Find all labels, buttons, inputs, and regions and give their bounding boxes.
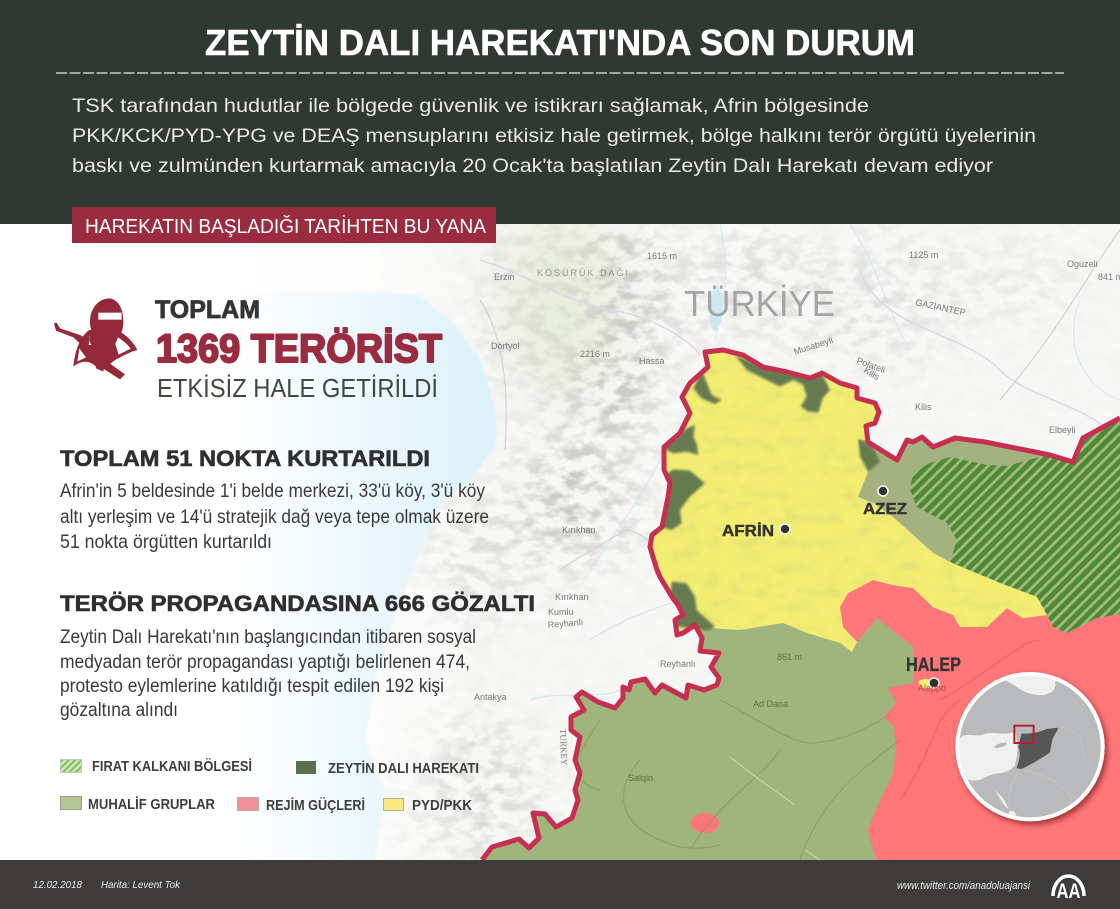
block: 51 nokta: TOPLAM 51 NOKTA KURTARILDI [60,446,430,471]
region: regime forces [840,580,1120,860]
block: 666 gözaltı: TERÖR PROPAGANDASINA 666 GÖZALTI [60,591,535,616]
legend: Muhalif: MUHALİF GRUPLAR [88,796,215,813]
legend: Fırat Kalkanı: FIRAT KALKANI BÖLGESİ [92,758,252,775]
locator square [1014,726,1034,743]
title: ZEYTİN DALI HAREKATI'NDA SON DURUM [205,22,915,63]
intro paragraph: PKK/KCK/PYD-YPG ve DEAŞ mensuplarını etkisiz hale getirmek, bölge halkını terör örgütü üyelerinin [72,125,1036,147]
block: 666 gözaltı: protesto eylemlerine katıldığı tespit edilen 192 kişi [60,676,444,697]
sea [0,292,496,860]
small map place names: KÖSÜRÜK DAĞI [537,268,630,278]
small map place names: Reyhanlı [547,617,584,630]
footer credits: 12.02.2018 [33,880,82,891]
small map place names: Kilis [862,365,882,382]
terrain on yellow [658,358,1008,642]
icon: Anadolu Agency logo: AA [1056,880,1080,903]
region: opposition groups north [858,440,1102,618]
footer credits: Harita: Levent Tok [101,880,181,891]
roads [577,640,1040,860]
small map place names: Hassa [639,356,665,366]
region: opposition groups south [470,600,920,860]
small map place names: Oguzeli [1067,259,1098,269]
map of the Syrian territories by control: 861 m [777,652,802,662]
legend: Zeytin Dalı: ZEYTİN DALI HAREKATI [328,760,479,777]
Syria [1017,728,1058,769]
white fade over the left of the map [0,224,470,860]
city: Halep [906,655,961,693]
legend: Rejim [238,797,365,814]
stat: Toplam 1369 Terörist: ETKİSİZ HALE GETİRİLDİ [157,373,438,403]
small map place names: Kumlu [548,607,574,617]
stat: Toplam 1369 Terörist: TOPLAM [155,296,260,324]
small map place names: Kırıkhan [562,525,596,535]
map of the Syrian territories by control [470,340,1120,860]
rivers and provincial lines [480,224,1120,700]
block: 666 gözaltı [60,591,535,721]
small map place names: TURKEY [558,729,569,766]
legend [60,758,479,814]
block: 51 nokta [60,446,489,553]
small map place names: 2216 m [580,349,610,359]
small map place names: Reyhanlı [660,659,696,669]
intro paragraph: TSK tarafından hudutlar ile bölgede güvenlik ve istikrarı sağlamak, Afrin bölgesinde [72,95,869,117]
city: Azez: AZEZ [863,501,907,518]
small map place names: GAZİANTEP [915,297,967,318]
small map place names: Musabeyli [793,335,834,357]
small map place names [474,250,1120,766]
map background [290,224,1120,860]
block: 666 gözaltı: gözaltına alındı [60,700,178,721]
intro paragraph: baskı ve zulmünden kurtarmak amacıyla 20 Ocak'ta başlatılan Zeytin Dalı Harekatı devam ediyor [72,155,994,177]
small map place names: 1615 m [647,251,677,261]
city: Afrin [722,522,790,540]
legend: Rejim: REJİM GÜÇLERİ [266,797,365,814]
terrain shading [380,224,1120,860]
block: 51 nokta: altı yerleşim ve 14'ü stratejik dağ veya tepe olmak üzere [60,507,489,528]
regions: Olive Branch operation dark green [660,355,880,631]
Syrian border line [482,350,1120,860]
sea shapes [960,676,1056,816]
regime pocket [691,813,719,833]
city: Azez [863,486,907,518]
small map place names: Antakya [474,692,507,702]
city: Afrin: AFRİN [722,522,774,540]
small map place names: D-827 [678,560,688,585]
lake [709,285,723,331]
neighbouring borders [1008,694,1096,808]
red tag: HAREKATIN BAŞLADIĞI TARİHTEN BU YANA [85,215,487,238]
block: 666 gözaltı: Zeytin Dalı Harekatı'nın başlangıcından itibaren sosyal [60,627,476,648]
footer credits: www.twitter.com/anadoluajansi [897,880,1030,892]
footer credits [33,880,1030,892]
block: 666 gözaltı: medyadan terör propagandası yaptığı belirlenen 474, [60,652,470,673]
small map place names: Kilis [915,402,932,412]
stat: Toplam 1369 Terörist: 1369 TERÖRİST [156,326,442,371]
country label: Türkiye: TÜRKİYE [684,283,835,324]
block: 51 nokta: Afrin'in 5 beldesinde 1'i belde merkezi, 33'ü köy, 3'ü köy [60,481,485,502]
legend: PYD [384,797,472,814]
region: Euphrates Shield hatch [910,414,1120,633]
footer band [0,860,1120,909]
small map place names: 1125 m [909,250,938,260]
block: 51 nokta: 51 nokta örgütten kurtarıldı [60,532,272,553]
intro paragraph [72,95,1036,177]
small map place names: Kırıkhan [555,592,589,602]
small map place names: Dörtyol [491,341,520,351]
red tag [72,207,496,243]
city: Halep: Aleppo [918,683,946,693]
small map place names: Erzin [494,272,515,282]
legend: PYD: PYD/PKK [412,797,472,814]
small map place names: Polateli [855,355,886,375]
header band [0,0,1120,224]
small map place names: Elbeyli [1049,425,1076,435]
icon: masked terrorist with rifle [54,298,137,379]
region: PYD/PKK yellow [630,340,1047,652]
stat: Toplam 1369 Terörist [155,296,442,403]
map of the Syrian territories by control: Salqin [628,773,653,783]
inset locator map [950,665,1110,830]
city: Halep: HALEP [906,655,961,676]
map of the Syrian territories by control: Ad Dana [753,699,788,709]
